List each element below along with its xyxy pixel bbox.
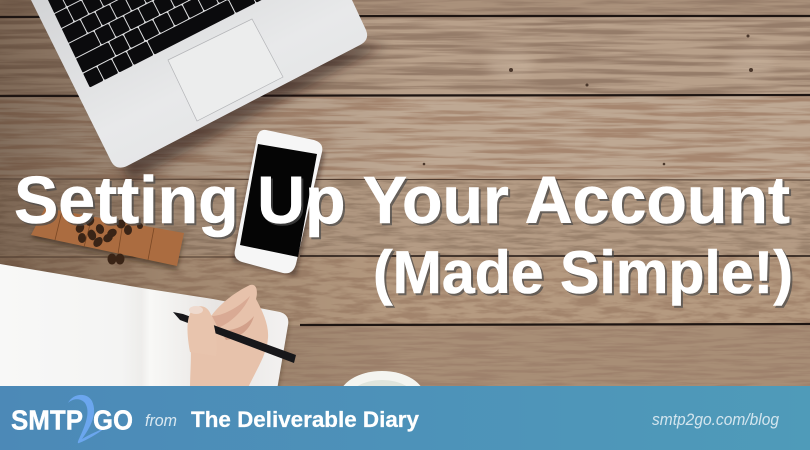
hand holding pen [173, 285, 296, 390]
trackpad [168, 19, 283, 121]
smartphone [232, 130, 325, 276]
title line 1: Setting Up Your Account [14, 163, 790, 238]
pen [173, 312, 296, 363]
blog name: The Deliverable Diary [191, 407, 419, 432]
title line 2: (Made Simple!) [373, 239, 793, 306]
chocolate bar with coffee beans [31, 208, 184, 270]
chocolate bar [31, 208, 184, 266]
keyboard keys [45, 0, 271, 88]
logo text SMTP: SMTP [11, 404, 83, 436]
title [14, 163, 793, 306]
blog url: smtp2go.com/blog [652, 410, 779, 429]
from label: from [145, 411, 177, 430]
laptop body [31, 0, 367, 168]
notebook pages [0, 264, 288, 390]
laptop [31, 0, 385, 182]
thumb [188, 306, 217, 356]
phone screen [240, 144, 317, 257]
thumb nail [189, 306, 203, 314]
coffee cup [344, 371, 420, 386]
hand [190, 285, 268, 390]
logo text GO: GO [93, 404, 133, 436]
open notebook [0, 264, 289, 392]
phone body [235, 130, 322, 273]
footer bar [0, 386, 810, 450]
logo: SMTP2GO [11, 395, 133, 443]
logo numeral 2 [68, 395, 105, 443]
coffee beans [74, 215, 143, 264]
